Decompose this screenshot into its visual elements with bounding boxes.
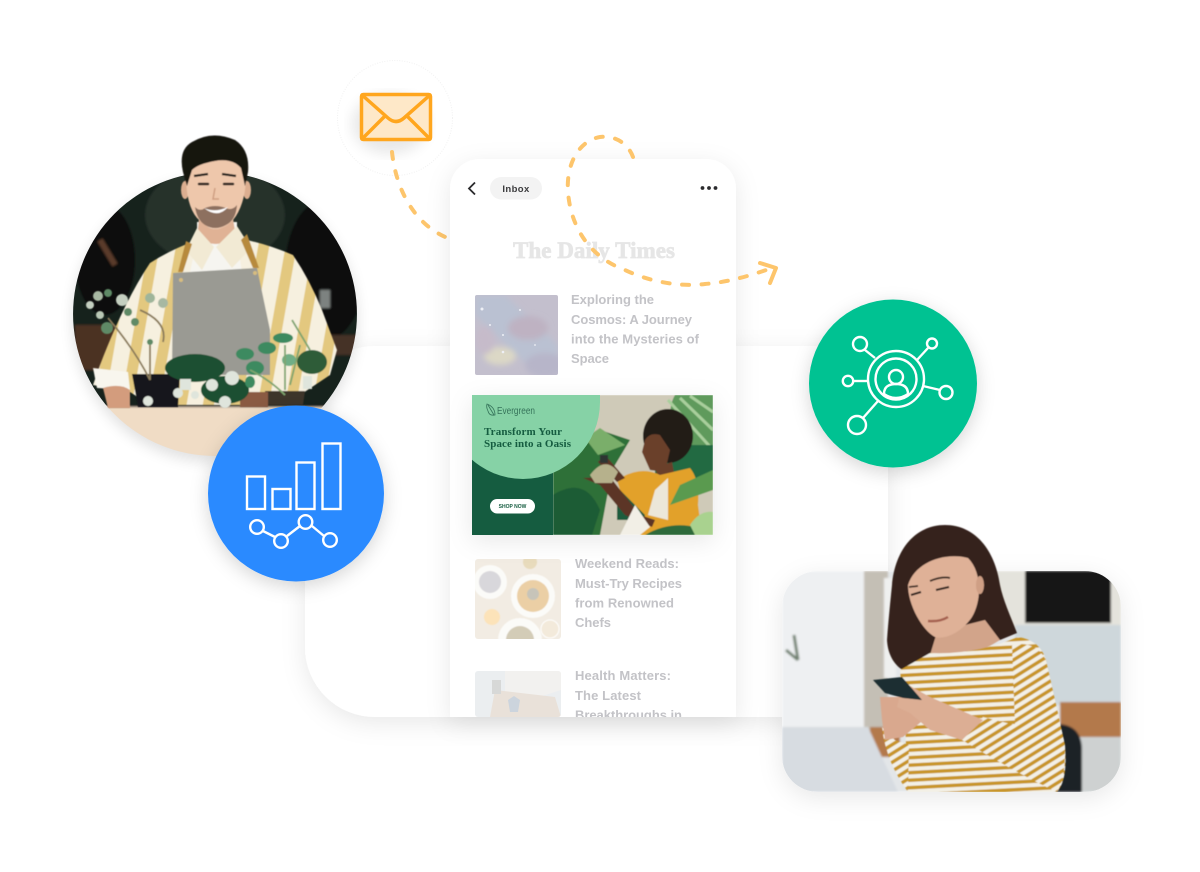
- ears: [181, 181, 189, 199]
- cuff and hand: [93, 368, 130, 390]
- inbox pill: [490, 177, 542, 200]
- collar: [186, 226, 251, 270]
- neck: [930, 620, 1000, 658]
- dashed path into phone: [392, 152, 450, 239]
- inbox pill: Inbox: [502, 184, 530, 195]
- thumbnail: cosmos: [475, 295, 558, 375]
- article: health: Breakthroughs in: [575, 708, 682, 722]
- article: health: [575, 670, 682, 717]
- photo: woman with phone: [782, 525, 1121, 792]
- article: recipes: Weekend Reads:: [575, 556, 679, 571]
- thumbnail: health: [475, 671, 561, 717]
- background card: [305, 346, 888, 717]
- article: cosmos: into the Mysteries of: [571, 332, 700, 346]
- pots: [132, 374, 180, 407]
- straps: [178, 234, 259, 272]
- ad woman hair: [643, 409, 693, 463]
- masthead: The Daily Times: [513, 238, 675, 263]
- plants: [86, 289, 168, 345]
- ad headline: [484, 426, 572, 450]
- icon: network badge: [809, 300, 977, 468]
- bar chart: [247, 444, 340, 509]
- icon: envelope: [362, 94, 430, 140]
- thumbnail: food: [475, 559, 561, 639]
- shirt: [93, 238, 337, 405]
- article: health: Health Matters:: [575, 668, 671, 683]
- article: cosmos: Exploring the: [571, 292, 654, 307]
- striped sleeve: [962, 644, 1065, 792]
- face: [908, 556, 979, 638]
- table: [106, 404, 324, 456]
- line chart: [250, 515, 337, 548]
- hair: [182, 135, 248, 186]
- article: cosmos: [571, 292, 700, 366]
- striped top: [900, 637, 1066, 792]
- phone: [873, 677, 922, 700]
- article: cosmos: Space: [571, 351, 609, 366]
- hands: [880, 697, 927, 740]
- dashed path out of phone: [568, 137, 776, 285]
- hair: [887, 525, 1017, 673]
- ad headline: Transform Your: [484, 426, 562, 438]
- face: [186, 155, 246, 229]
- panel: native ad: [468, 395, 717, 545]
- envelope badge: [338, 60, 452, 176]
- article: cosmos: Cosmos: A Journey: [571, 312, 693, 327]
- arrow head: [760, 263, 776, 283]
- article: recipes: Chefs: [575, 615, 611, 630]
- ad button: [490, 499, 535, 514]
- ad button: SHOP NOW: [499, 504, 527, 510]
- apron: [172, 268, 270, 375]
- icon: leaf: [487, 404, 495, 415]
- article: recipes: [575, 556, 682, 630]
- article: recipes: Must-Try Recipes: [575, 576, 682, 591]
- photo: florist: [70, 135, 365, 462]
- icon: back chevron: [469, 182, 475, 194]
- icon: more menu: [701, 186, 717, 190]
- neck and t-shirt: [190, 222, 242, 272]
- ad headline: Space into a Oasis: [484, 438, 572, 450]
- ad light circle: [472, 403, 600, 479]
- icon: analytics badge: [208, 406, 384, 582]
- article: recipes: from Renowned: [575, 596, 674, 610]
- ad photo: [553, 395, 713, 535]
- panel: phone newsletter: [450, 159, 736, 722]
- ad dark panel: [472, 460, 553, 535]
- brand: Evergreen: [497, 406, 535, 417]
- article: health: The Latest: [575, 688, 642, 703]
